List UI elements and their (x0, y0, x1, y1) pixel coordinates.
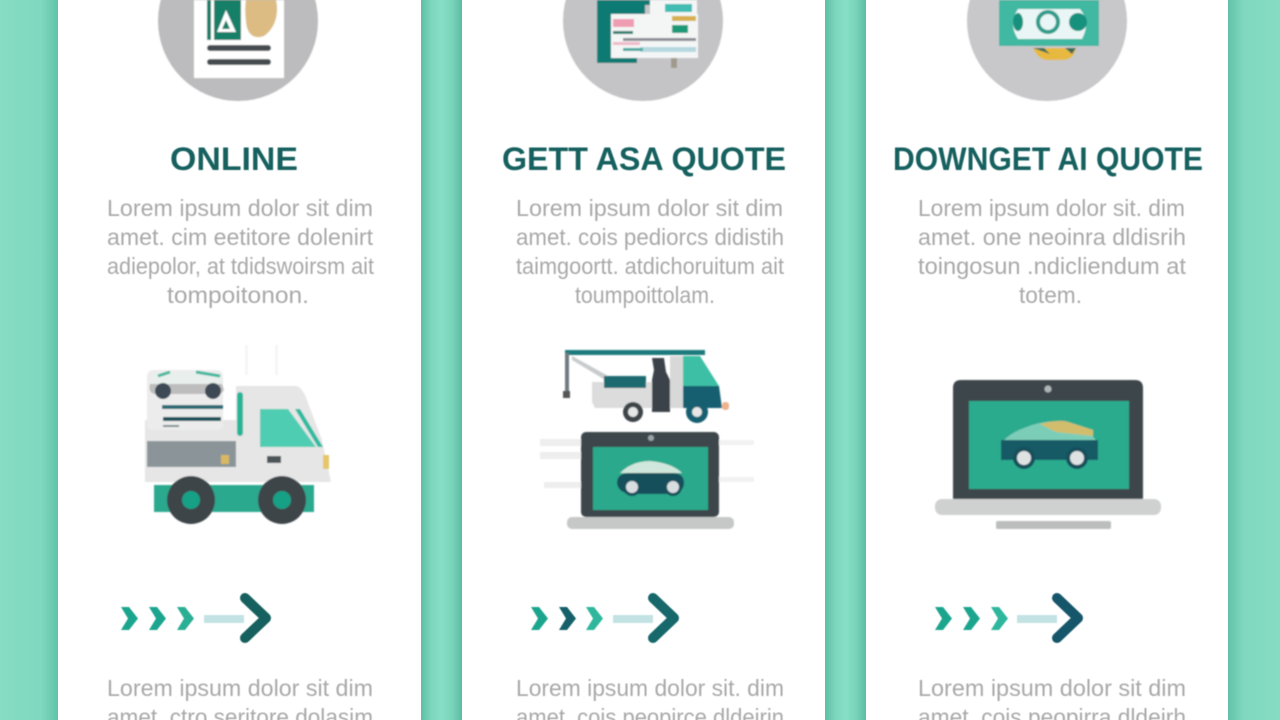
text block (918, 195, 1187, 308)
card background (462, 0, 825, 720)
text block (918, 675, 1186, 720)
arrow: progress chevrons (121, 598, 266, 638)
text block: taimgoortt. atdichoruitum ait (516, 253, 785, 279)
text block: toingosun .ndicliendum at (918, 253, 1187, 279)
arrow: progress chevrons (531, 598, 674, 638)
card background (58, 0, 421, 720)
text block (516, 195, 785, 308)
icon: laptop with car (935, 380, 1161, 529)
text block (107, 195, 375, 308)
icon: document in grey circle (158, 0, 318, 101)
panel: download quote (866, 0, 1228, 720)
text block: adiepolor, at tdidswoirsm ait (107, 253, 375, 279)
text block: Lorem ipsum dolor sit. dim (918, 195, 1185, 221)
text block: Lorem ipsum dolor sit dim (107, 195, 373, 221)
icon: banknote in grey circle (967, 0, 1127, 101)
text block: Lorem ipsum dolor sit. dim (516, 675, 784, 701)
text block: Lorem ipsum dolor sit dim (516, 195, 783, 221)
text block: Lorem ipsum dolor sit dim (918, 675, 1186, 701)
heading: ONLINE (170, 141, 298, 177)
icon: tow truck above laptop (540, 350, 754, 529)
text block (516, 675, 784, 720)
text block: amet. cim eetitore dolenirt (107, 224, 374, 250)
text block: toumpoittolam. (575, 282, 715, 308)
text block: amet. one neoinra dldisrih (918, 224, 1186, 250)
heading: DOWNGET AI QUOTE (893, 141, 1203, 177)
icon: white delivery truck (145, 345, 331, 524)
panel: get a quote (462, 0, 825, 720)
text block: tompoitonon. (167, 282, 309, 308)
heading: GETT ASA QUOTE (502, 141, 786, 177)
text block: totem. (1019, 282, 1082, 308)
text block: amet. cois pediorcs didistih (516, 224, 784, 250)
text block (107, 675, 373, 720)
card background (866, 0, 1228, 720)
arrow: progress chevrons (935, 598, 1078, 638)
text block: Lorem ipsum dolor sit dim (107, 675, 373, 701)
panel: online (58, 0, 421, 720)
icon: form sheet in grey circle (563, 0, 723, 101)
